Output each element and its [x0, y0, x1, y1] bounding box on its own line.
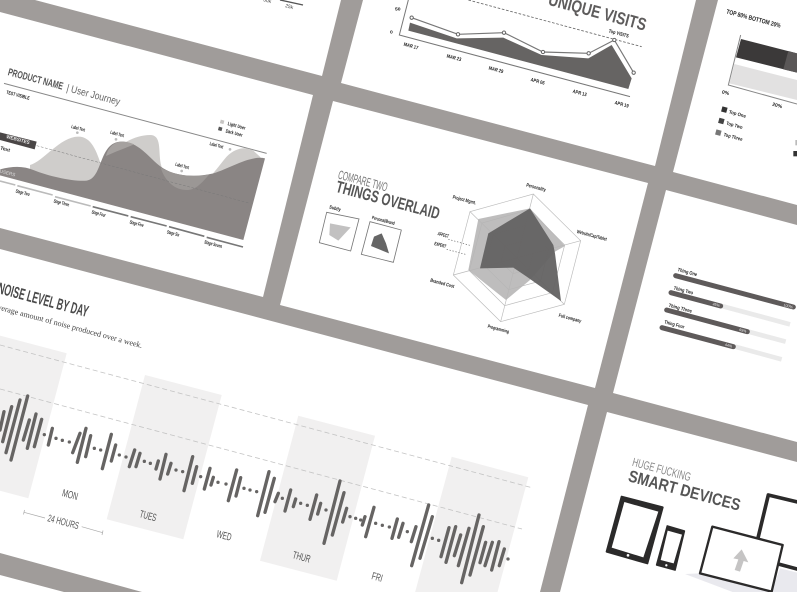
- panel: product user journey: [0, 12, 313, 297]
- timeline stages: Stage Two: [15, 188, 30, 198]
- timeline stages: [0, 181, 243, 250]
- radar chart: Personality: [525, 182, 547, 193]
- panel: progress bars: [613, 190, 797, 442]
- area chart: user journey: [0, 135, 265, 240]
- day labels: FRI: [370, 570, 384, 585]
- text: visible note: TEST VISIBLE: [5, 90, 31, 102]
- timeline stages: Stage Five: [129, 219, 144, 229]
- radar chart: Full company: [558, 313, 582, 325]
- icon: laptop: [685, 527, 783, 592]
- timeline stages: Stage Seven: [203, 239, 223, 250]
- timeline stages: Stage Four: [91, 209, 106, 219]
- bar: thing four: Thing Four: [663, 319, 685, 331]
- chart point labels: Label Text: [174, 162, 190, 171]
- axis labels: APR 13: [572, 89, 587, 98]
- radar chart: Branded Cost: [429, 278, 455, 290]
- heading: compare two: COMPARE TWO: [337, 168, 389, 194]
- label: dark tag: WEBSITES: [5, 134, 31, 146]
- line chart: visits: [399, 0, 635, 97]
- waveform: part one: [0, 396, 278, 516]
- icon: tablet: [607, 497, 663, 563]
- bar: thing one: Thing One: [677, 267, 698, 278]
- radar chart: EXPERT: [433, 241, 447, 250]
- stacked bar chart: 0%: [721, 89, 730, 97]
- heading: huge fucking: HUGE FUCKING: [631, 455, 692, 484]
- day labels: [61, 487, 384, 585]
- duration: 24 hours: 24 HOURS: [46, 513, 80, 532]
- axis labels: 50: [395, 7, 401, 13]
- icon: phone: [657, 526, 684, 570]
- axis labels: 0: [390, 29, 393, 35]
- icon: desktop monitor: [753, 495, 797, 592]
- bar: thing three: Thing Three: [668, 303, 693, 315]
- panel: unique visits: [341, 0, 696, 166]
- day labels: TUES: [138, 508, 158, 524]
- panel: top left fragment: 25k: [284, 3, 294, 11]
- bar: thing three: [667, 303, 786, 342]
- axis labels: MAR 17: [403, 42, 419, 52]
- axis labels: Top VISITS: [608, 28, 630, 40]
- panel: noise level by day: [0, 249, 588, 592]
- panel: top 80 bottom 20: [673, 0, 797, 205]
- heading: user journey: | User Journey: [65, 83, 122, 108]
- thumbnail: subtly: [319, 204, 359, 251]
- timeline stages: Stage Three: [53, 198, 70, 208]
- bar: thing four: 44%: [724, 343, 733, 349]
- bar: thing four: [662, 319, 782, 359]
- chart point labels: Label Text: [209, 141, 224, 151]
- legend: top items: [715, 106, 797, 156]
- day labels: WED: [215, 528, 233, 544]
- thumbnail: personal brand: [361, 215, 401, 262]
- axis labels: APR 06: [530, 77, 545, 87]
- radar chart: [429, 182, 608, 335]
- bar: thing one: 100%: [783, 303, 794, 310]
- chart point labels: [70, 124, 231, 172]
- waveform: part two: [281, 481, 510, 583]
- panel: top left fragment: [35, 0, 341, 76]
- day labels: MON: [61, 487, 79, 503]
- day labels: THUR: [291, 549, 312, 566]
- heading: smart devices: SMART DEVICES: [626, 467, 743, 515]
- bar: thing two: Thing Two: [673, 285, 694, 296]
- legend: light and dark user: [218, 120, 246, 139]
- axis labels: MAR 23: [446, 53, 462, 63]
- panel: compare two things overlaid: [280, 101, 648, 388]
- chart point labels: Label Text: [109, 130, 125, 139]
- legend: top items: Top Three: [723, 132, 743, 143]
- legend: top items: Top Two: [725, 121, 743, 131]
- shaded day bands: [0, 333, 528, 592]
- heading: noise level by day: NOISE LEVEL BY DAY: [0, 280, 90, 321]
- thumbnail: subtly: Subtly: [328, 204, 341, 213]
- heading: things overlaid: THINGS OVERLAID: [334, 177, 442, 223]
- axis labels: [390, 7, 630, 110]
- panel: smart devices: [560, 412, 797, 592]
- axis labels: MAR 29: [488, 65, 504, 75]
- stacked bar chart: 20%: [771, 102, 783, 110]
- duration: 24 hours: [24, 510, 103, 535]
- bar: thing two: 45%: [712, 302, 721, 308]
- bar: thing three: 65%: [739, 328, 748, 334]
- axis labels: APR 19: [614, 100, 629, 110]
- legend: top items: Top One: [728, 109, 747, 120]
- label: dark tag: [0, 132, 37, 149]
- icon: up arrow: [733, 549, 748, 572]
- legend: light and dark user: Light User: [227, 121, 246, 132]
- heading: product name: PRODUCT NAME: [7, 67, 64, 93]
- chart point labels: Label Text: [70, 124, 86, 134]
- radar chart: Project Mgmt.: [452, 194, 477, 207]
- radar chart: AFFECT: [437, 231, 449, 240]
- bar: thing one: [676, 267, 794, 310]
- radar chart: Programming: [487, 324, 510, 335]
- thumbnail: personal brand: Personal/Brand: [371, 215, 395, 227]
- legend: light and dark user: Dark User: [225, 128, 243, 139]
- heading: top bottom: TOP 80% BOTTOM 20%: [725, 9, 782, 30]
- radar chart: Website/Cap/Tablet: [576, 229, 608, 243]
- stacked bar chart: [721, 35, 797, 110]
- bar: thing two: [671, 285, 790, 324]
- timeline stages: Stage Six: [166, 229, 180, 239]
